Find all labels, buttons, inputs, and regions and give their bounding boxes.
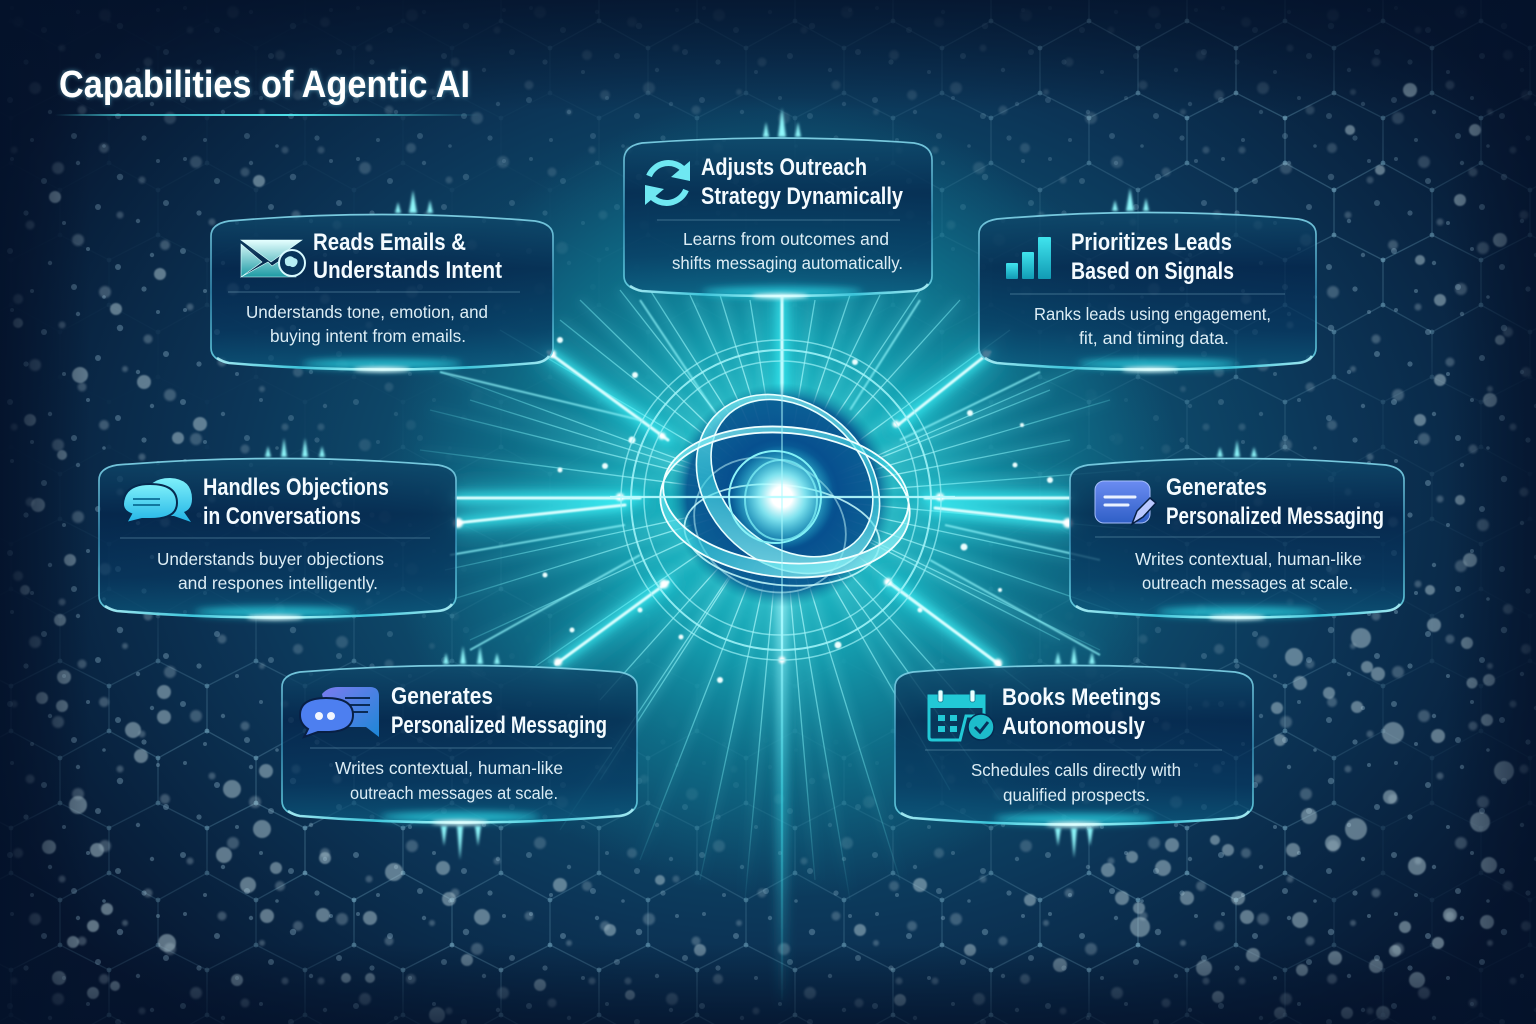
description: shifts messaging automatically. [672,253,903,273]
heading [1071,229,1234,285]
central AI orb [610,340,955,660]
heading: Books Meetings [1002,684,1161,711]
icon: calendar with check [929,690,994,740]
description [971,760,1181,805]
heading: Understands Intent [313,257,502,284]
icon: chat bubbles [123,478,192,523]
panel: adjusts outreach strategy [624,108,932,298]
icon: envelope with brain globe [241,240,305,277]
description: and respones intelligently. [178,573,378,593]
description: Learns from outcomes and [683,229,889,249]
concentric rings [621,340,941,660]
panel: books meetings [895,646,1253,858]
tilted ribbon [660,358,916,610]
heading: Based on Signals [1071,258,1234,285]
description [335,758,563,803]
icon: refresh arrows [645,161,690,205]
heading: Personalized Messaging [391,712,607,739]
heading [701,154,904,210]
secondary beams [440,300,1100,655]
heading: in Conversations [203,503,361,530]
heading: Handles Objections [203,474,389,501]
icon: message bubbles [300,687,379,737]
description [157,549,384,593]
lower thin loops [672,433,885,617]
heading [203,474,389,530]
description: Ranks leads using engagement, [1034,304,1271,324]
ring flares [453,350,1073,667]
panel: generates personalized messaging (right) [1070,440,1404,620]
bright core [730,445,834,549]
description [672,229,903,273]
heading: Adjusts Outreach [701,154,867,181]
heading: Personalized Messaging [1166,503,1384,530]
description: Schedules calls directly with [971,760,1181,780]
icon: document with pen [1095,481,1156,524]
heading [313,229,502,284]
heading: Prioritizes Leads [1071,229,1232,256]
description: fit, and timing data. [1079,328,1229,348]
panel: prioritizes leads [979,188,1316,372]
description: qualified prospects. [1003,785,1150,805]
heading [1166,474,1384,530]
sparkles [542,337,1053,683]
description: outreach messages at scale. [350,783,558,803]
icon: bar chart [1006,237,1051,279]
description: outreach messages at scale. [1142,573,1353,593]
heading [391,683,607,739]
central radial glow [382,97,1182,897]
panel: handles objections [99,438,456,620]
description: Writes contextual, human-like [335,758,563,778]
glowing fan of rays [420,290,1140,900]
spoke cores [456,296,1070,665]
inner rings [729,451,821,543]
heading [1002,684,1161,740]
heading: Autonomously [1002,713,1146,740]
heading: Generates [1166,474,1267,501]
heading: Reads Emails & [313,229,466,256]
panel: reads emails [211,190,553,372]
spoke halo [456,296,1070,665]
heading: Strategy Dynamically [701,183,904,210]
description: Writes contextual, human-like [1135,549,1362,569]
description [246,302,488,346]
light rays [420,290,1140,1010]
description: Understands buyer objections [157,549,384,569]
description: Understands tone, emotion, and [246,302,488,322]
downward beam [778,590,786,1010]
title: Capabilities of Agentic AI [59,64,470,106]
description: buying intent from emails. [270,326,466,346]
description [1135,549,1362,593]
spoke glow [456,296,1070,665]
panel: generates personalized messaging (left) [282,646,637,860]
heading: Generates [391,683,493,710]
horizontal ribbon [654,416,916,588]
description [1034,304,1271,348]
dark inner disc [670,383,894,607]
